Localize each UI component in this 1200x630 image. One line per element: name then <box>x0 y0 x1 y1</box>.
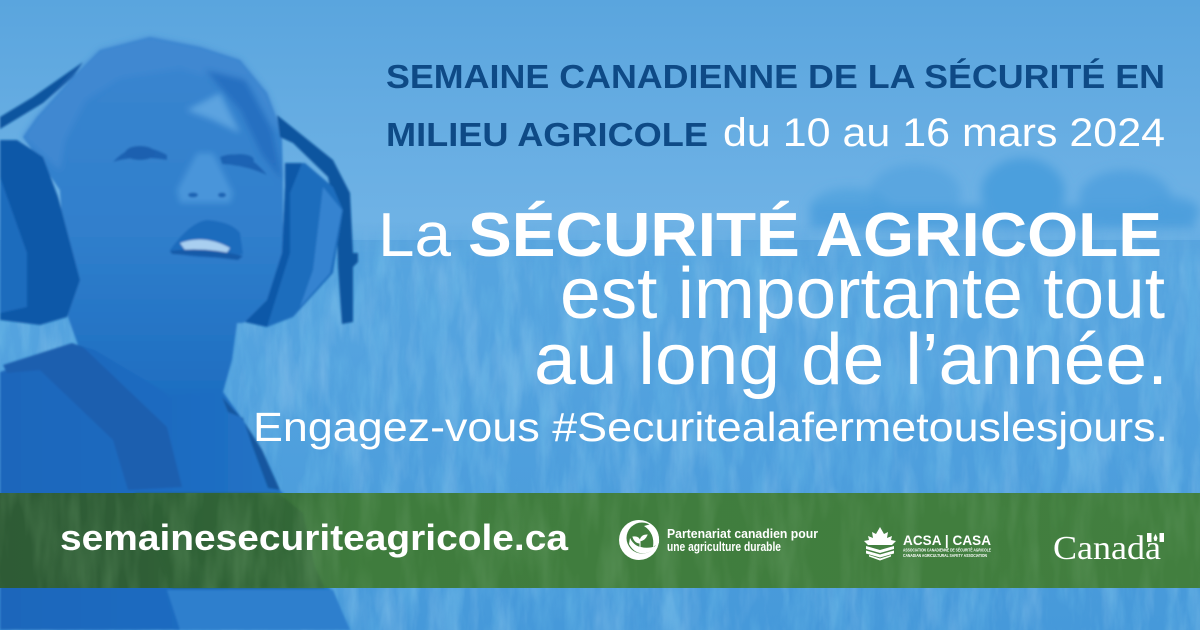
right headband <box>277 115 358 324</box>
logo: ACSA CASA: CANADIAN AGRICULTURAL SAFETY ASSOCIATION <box>903 553 988 558</box>
icon: flag <box>1147 533 1164 542</box>
heading: event name and dates: MILIEU AGRICOLE <box>386 116 708 153</box>
heading: event name and dates: du 10 au 16 mars 2024 <box>723 111 1165 155</box>
main message: La <box>378 201 452 270</box>
hair <box>23 37 282 170</box>
right ear muff <box>245 163 343 327</box>
logo: Canada wordmark: Canada <box>1053 530 1161 567</box>
heading: event name and dates <box>386 58 1165 155</box>
forehead highlight <box>187 93 240 133</box>
left ear muff <box>0 140 80 325</box>
website url: semainesecuriteagricole.ca <box>60 517 569 558</box>
photo: child wearing ear protection <box>0 37 358 630</box>
heading: event name and dates: SEMAINE CANADIENNE DE LA SÉCURITÉ EN <box>386 58 1165 95</box>
icon: swirl with sprout <box>619 520 659 560</box>
body with overalls <box>0 340 350 630</box>
main message: SÉCURITÉ AGRICOLE <box>468 201 1162 270</box>
logo: ACSA CASA: ASSOCIATION CANADIENNE DE SÉCURITÉ AGRICOLE <box>903 546 991 552</box>
hashtag call to action: Engagez-vous #Securitealafermetouslesjours. <box>253 404 1168 450</box>
icon: maple leaf over book <box>864 527 896 560</box>
logo: ACSA CASA <box>864 527 991 560</box>
main message: est importante tout <box>560 254 1165 334</box>
green band <box>0 493 1200 588</box>
eyes, nose and mouth <box>113 146 267 260</box>
logo: Partenariat canadien <box>619 520 818 560</box>
main message: au long de l’année. <box>534 320 1168 400</box>
main message <box>378 201 1168 400</box>
head <box>23 37 283 395</box>
tree line on the horizon <box>810 158 1200 229</box>
left headband <box>0 62 83 129</box>
logo: Partenariat canadien: une agriculture durable <box>667 540 781 554</box>
logo: ACSA CASA: ACSA | CASA <box>903 533 991 548</box>
logo: Partenariat canadien: Partenariat canadien pour <box>667 527 818 541</box>
